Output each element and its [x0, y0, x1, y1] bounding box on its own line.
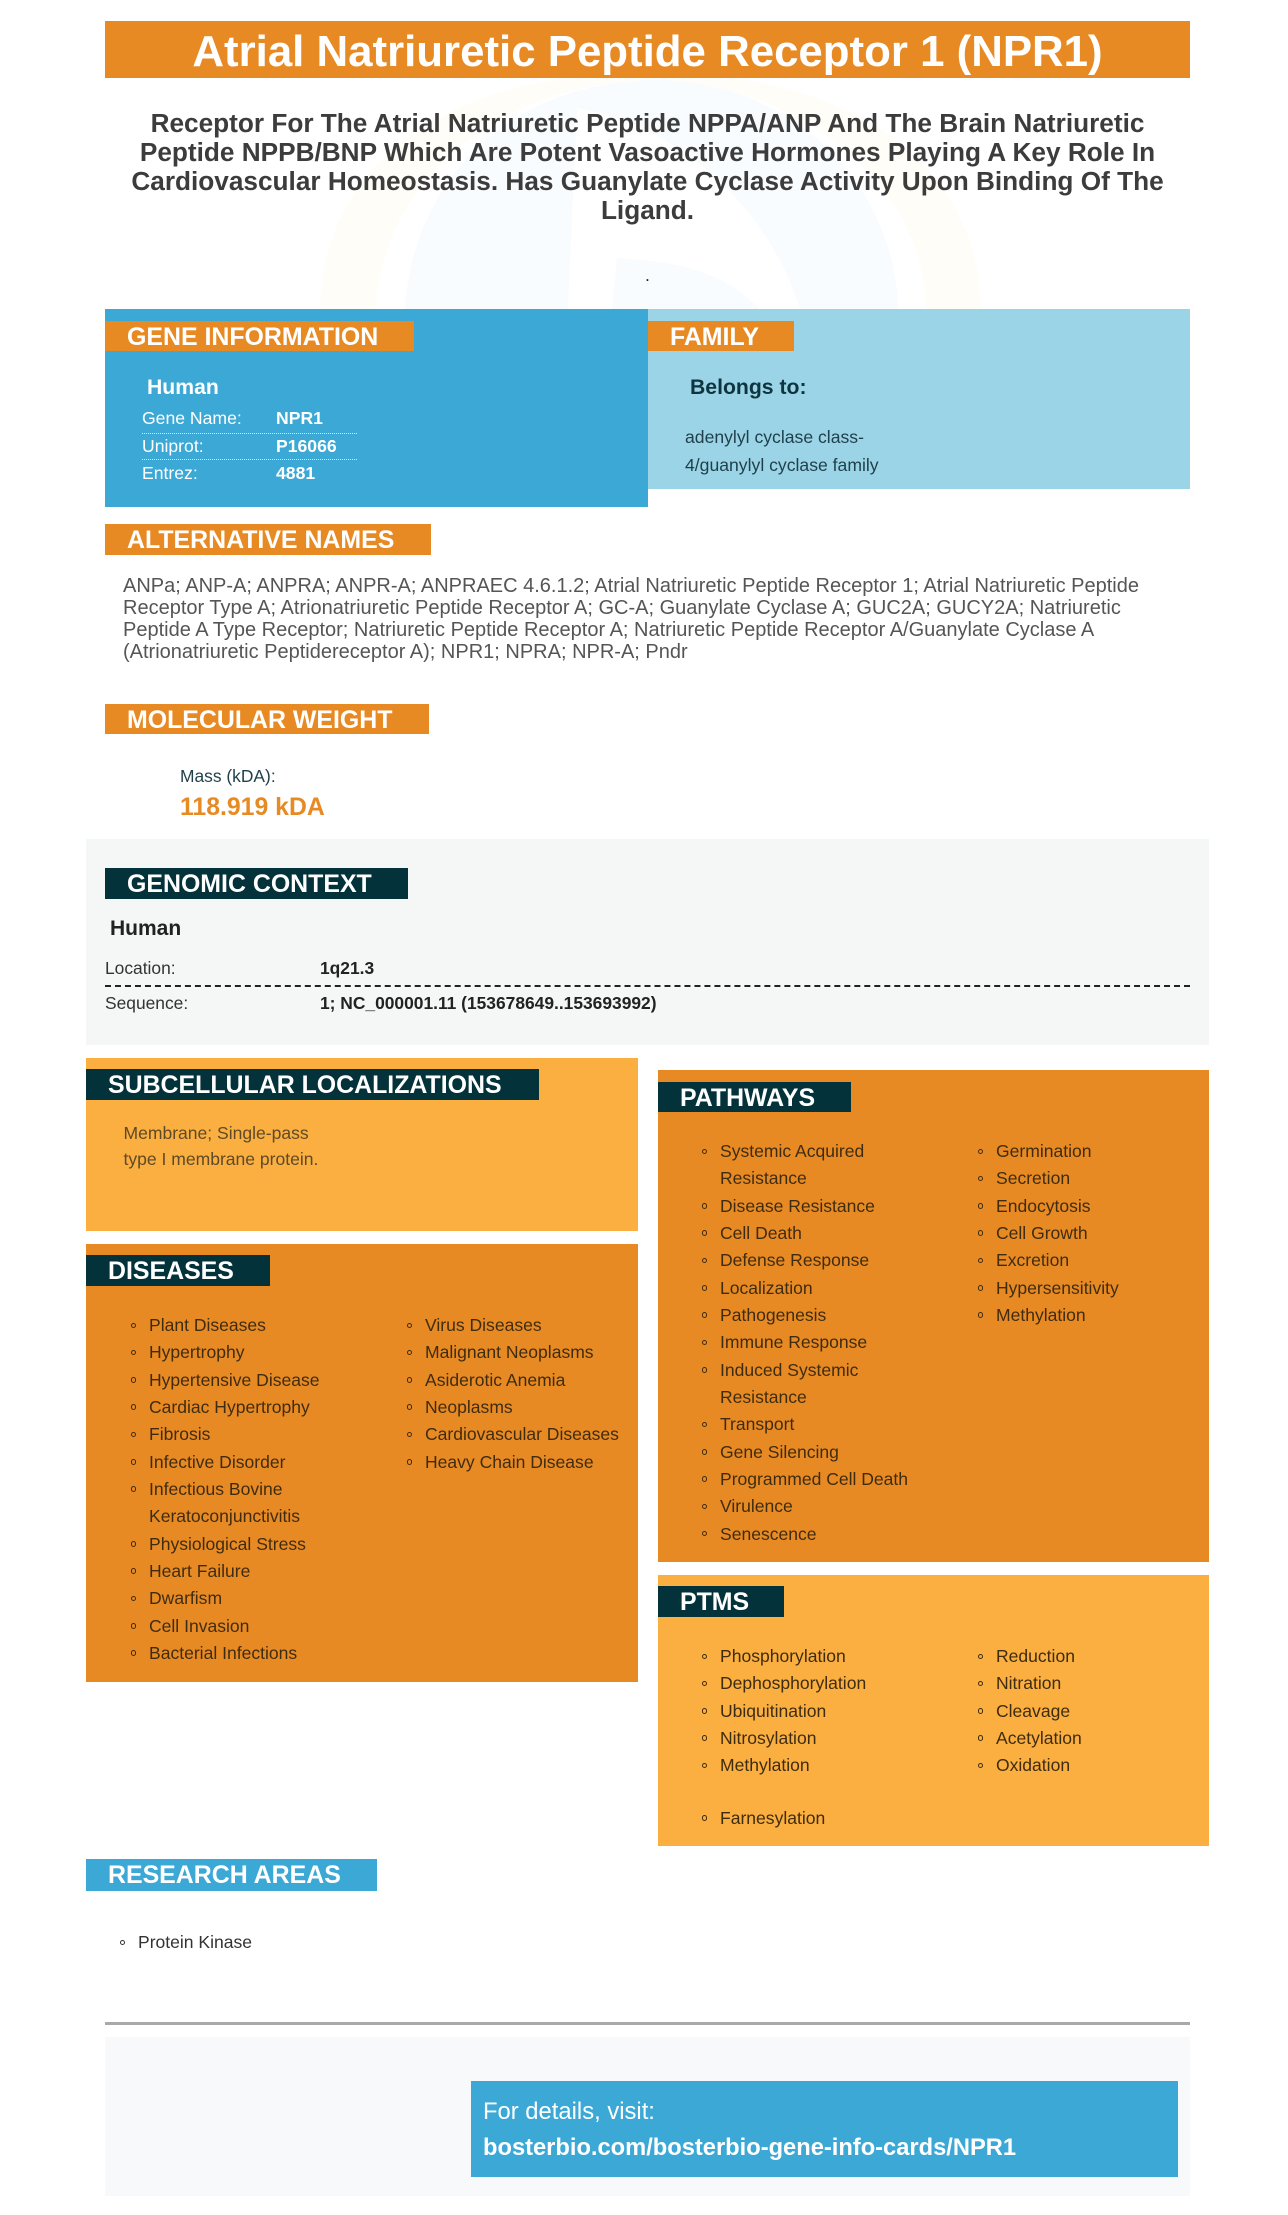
subtitle description: Peptide NPPB/BNP Which Are Potent Vasoactive Hormones Playing A Key Role In [140, 136, 1155, 166]
background watermark logo [300, 70, 1000, 310]
pathways list column 1: Induced Systemic [720, 1360, 858, 1380]
pathways list column 1: Disease Resistance [720, 1196, 875, 1216]
ptms list column 2: Cleavage [996, 1701, 1070, 1721]
heading: gene information: GENE INFORMATION [127, 323, 378, 351]
localization text: Membrane; Single-pass [124, 1123, 309, 1143]
pathways list column 1: Gene Silencing [720, 1442, 839, 1462]
ptms list column 1: Nitrosylation [720, 1728, 816, 1748]
gene identifiers table: Gene Name: [142, 408, 242, 428]
panel: pathways [658, 1070, 1209, 1562]
panel: genomic context [86, 839, 1209, 1045]
diseases list column 1: Bacterial Infections [149, 1643, 297, 1663]
separator dot: . [645, 265, 650, 285]
gene identifiers table: Uniprot: [142, 436, 204, 456]
diseases list column 1: Physiological Stress [149, 1534, 306, 1554]
pathways list column 1: Programmed Cell Death [720, 1469, 908, 1489]
heading: alternative names: ALTERNATIVE NAMES [127, 526, 394, 554]
diseases list column 1: Cardiac Hypertrophy [149, 1397, 310, 1417]
panel: ptms [658, 1575, 1209, 1846]
diseases list column 2: Asiderotic Anemia [425, 1370, 565, 1390]
gene identifiers table: NPR1 [276, 408, 323, 428]
pathways list column 2: Secretion [996, 1168, 1070, 1188]
family description: adenylyl cyclase class- [685, 427, 864, 447]
heading: molecular weight: MOLECULAR WEIGHT [127, 706, 392, 734]
panel: gene information [105, 309, 648, 507]
callout url: bosterbio.com/bosterbio-gene-info-cards/NPR1 [483, 2135, 1016, 2161]
callout: details link [471, 2081, 1178, 2177]
footer panel [105, 2037, 1190, 2196]
pathways list column 1: Pathogenesis [720, 1305, 826, 1325]
family description: 4/guanylyl cyclase family [685, 455, 879, 475]
pathways list column 1: Localization [720, 1278, 813, 1298]
pathways list column 1: Defense Response [720, 1250, 869, 1270]
localization text: type I membrane protein. [124, 1149, 318, 1169]
pathways list column 2: Germination [996, 1141, 1092, 1161]
pathways list column 1: Transport [720, 1414, 794, 1434]
ptms list column 2 [978, 1646, 1082, 1775]
alternative names text: ANPa; ANP-A; ANPRA; ANPR-A; ANPRAEC 4.6.1.2; Atrial Natriuretic Peptide Receptor 1; Atrial Natriuretic Peptide [123, 575, 1139, 597]
heading: genomic context: GENOMIC CONTEXT [127, 870, 372, 898]
ptms list column 2: Acetylation [996, 1728, 1082, 1748]
location row: 1q21.3 [320, 958, 374, 978]
subtitle description: Receptor For The Atrial Natriuretic Peptide NPPA/ANP And The Brain Natriuretic [151, 108, 1144, 138]
subtitle description: Cardiovascular Homeostasis. Has Guanylate Cyclase Activity Upon Binding Of The [131, 166, 1164, 196]
location row [105, 958, 374, 978]
heading: family: FAMILY [670, 323, 759, 351]
sequence row: 1; NC_000001.11 (153678649..153693992) [320, 993, 657, 1013]
diseases list column 1: Infective Disorder [149, 1452, 285, 1472]
pathways list column 2 [978, 1141, 1119, 1325]
pathways list column 1 [702, 1141, 908, 1544]
localization text [124, 1123, 318, 1169]
gene identifiers table [142, 408, 357, 483]
diseases list column 1: Dwarfism [149, 1588, 222, 1608]
title banner: Atrial Natriuretic Peptide Receptor 1 (NPR1) [192, 27, 1103, 76]
ptms list column 2: Nitration [996, 1673, 1061, 1693]
pathways list column 2: Excretion [996, 1250, 1069, 1270]
pathways list column 1: Senescence [720, 1524, 816, 1544]
pathways list column 1: Systemic Acquired [720, 1141, 864, 1161]
diseases list column 2: Virus Diseases [425, 1315, 542, 1335]
location row: Location: [105, 958, 176, 978]
pathways list column 2: Cell Growth [996, 1223, 1088, 1243]
diseases list column 2: Cardiovascular Diseases [425, 1424, 619, 1444]
diseases list column 1: Hypertensive Disease [149, 1370, 320, 1390]
gene identifiers table: P16066 [276, 436, 337, 456]
ptms list column 1: Ubiquitination [720, 1701, 826, 1721]
species label: Human [147, 376, 219, 399]
panel: subcellular localizations [86, 1058, 638, 1231]
diseases list column 1: Hypertrophy [149, 1342, 244, 1362]
callout label: For details, visit: [483, 2098, 655, 2125]
diseases list column 1: Infectious Bovine [149, 1479, 283, 1499]
belongs to label: Belongs to: [690, 376, 807, 399]
ptms list column 1: Phosphorylation [720, 1646, 846, 1666]
sequence row: Sequence: [105, 993, 188, 1013]
diseases list column 1 [131, 1315, 320, 1663]
pathways list column 1: Resistance [720, 1387, 807, 1407]
heading: pathways: PATHWAYS [680, 1084, 815, 1112]
pathways list column 1: Immune Response [720, 1332, 867, 1352]
alternative names text: Peptide A Type Receptor; Natriuretic Peptide Receptor A; Natriuretic Peptide Receptor A/Guanylate Cyclase A [123, 619, 1094, 641]
ptms list column 1: Dephosphorylation [720, 1673, 866, 1693]
diseases list column 2: Neoplasms [425, 1397, 513, 1417]
heading: ptms [658, 1586, 784, 1617]
ptms list column 2: Reduction [996, 1646, 1075, 1666]
heading: diseases [86, 1255, 270, 1286]
ptms list column 1: Farnesylation [720, 1808, 825, 1828]
pathways list column 2: Methylation [996, 1305, 1086, 1325]
research areas list: Protein Kinase [138, 1932, 252, 1952]
gene identifiers table: Entrez: [142, 463, 198, 483]
pathways list column 1: Cell Death [720, 1223, 802, 1243]
alternative names text: Receptor Type A; Atrionatriuretic Peptide Receptor A; GC-A; Guanylate Cyclase A; GUC2A; GUCY2A; Natriuretic [123, 597, 1121, 619]
mass value: 118.919 kDA [180, 794, 325, 821]
ptms list column 1: Methylation [720, 1755, 810, 1775]
diseases list column 2: Malignant Neoplasms [425, 1342, 594, 1362]
alternative names text: (Atrionatriuretic Peptidereceptor A); NPR1; NPRA; NPR-A; Pndr [123, 641, 688, 663]
pathways list column 1: Resistance [720, 1168, 807, 1188]
ptms list column 2: Oxidation [996, 1755, 1070, 1775]
diseases list column 2 [407, 1315, 619, 1472]
gene identifiers table: 4881 [276, 463, 315, 483]
diseases list column 1: Heart Failure [149, 1561, 250, 1581]
sequence row [105, 985, 1190, 1017]
subtitle description: Ligand. [601, 194, 694, 224]
panel: diseases [86, 1244, 638, 1682]
heading: ptms: PTMS [680, 1588, 749, 1616]
heading: diseases: DISEASES [108, 1257, 234, 1285]
pathways list column 1: Virulence [720, 1496, 793, 1516]
panel: family [648, 309, 1190, 489]
heading: research areas: RESEARCH AREAS [108, 1861, 341, 1889]
diseases list column 1: Cell Invasion [149, 1616, 249, 1636]
species label: Human [110, 917, 181, 940]
diseases list column 1: Plant Diseases [149, 1315, 266, 1335]
heading: family [648, 321, 794, 351]
heading: subcellular localizations: SUBCELLULAR LOCALIZATIONS [108, 1071, 502, 1099]
pathways list column 2: Endocytosis [996, 1196, 1091, 1216]
diseases list column 2: Heavy Chain Disease [425, 1452, 594, 1472]
heading: pathways [658, 1082, 851, 1112]
ptms list column 1 [702, 1646, 866, 1828]
family description [685, 427, 879, 475]
pathways list column 2: Hypersensitivity [996, 1278, 1119, 1298]
alternative names text [123, 575, 1139, 663]
diseases list column 1: Keratoconjunctivitis [149, 1506, 300, 1526]
diseases list column 1: Fibrosis [149, 1424, 210, 1444]
subtitle description [131, 108, 1164, 224]
mass label: Mass (kDA): [180, 766, 276, 786]
